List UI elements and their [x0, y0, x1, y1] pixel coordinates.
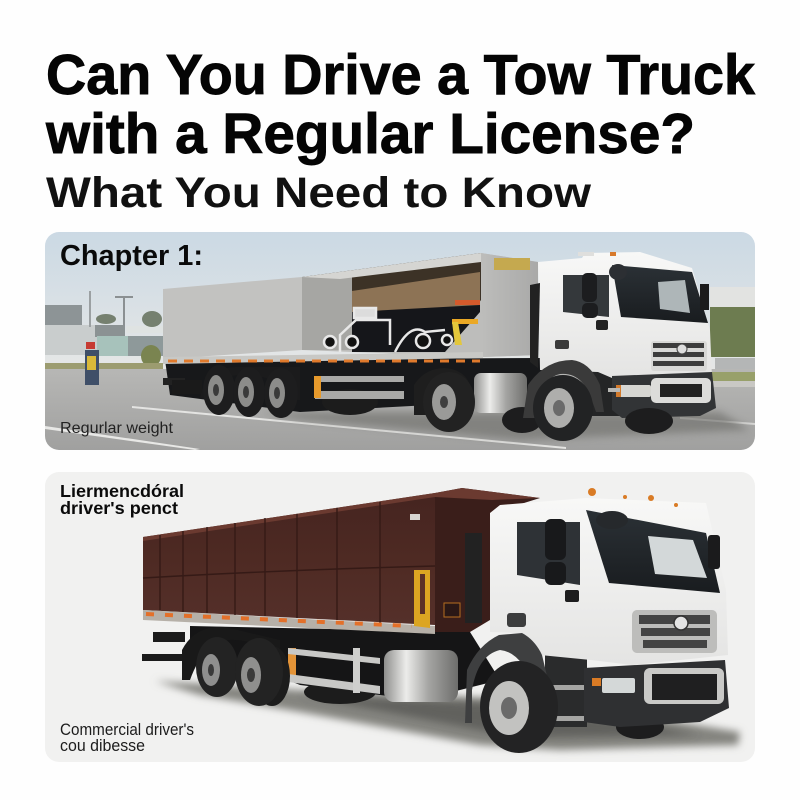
- heading: commercial driver's permit: Liermencdóral: [60, 481, 184, 501]
- rear wheels: [182, 627, 290, 706]
- truck cab: white: [502, 252, 712, 433]
- title: with a Regular License?: [45, 102, 695, 166]
- label: commercial driver's course: cou dibesse: [60, 736, 145, 755]
- title: What You Need to Know: [46, 169, 592, 217]
- background scene: sky, buildings and road: [45, 232, 755, 450]
- front wheels: [533, 375, 673, 441]
- panel: commercial truck: [45, 472, 755, 762]
- label: commercial driver's course: Commercial driver's: [60, 720, 194, 739]
- ground shadow: [155, 681, 740, 750]
- rear and middle wheels: [204, 372, 475, 432]
- side guard and fuel tank: [314, 373, 527, 413]
- truck cab: grille: [632, 610, 717, 653]
- truck cab: bumper and headlights: [608, 372, 716, 418]
- heading: commercial driver's permit: driver's penct: [60, 498, 178, 518]
- truck cab: grille: [651, 341, 707, 371]
- truck cab: bumper and headlights: [550, 660, 729, 727]
- title: [45, 43, 755, 217]
- brown cargo container: [143, 488, 540, 634]
- cargo: wheelchairs inside box: [324, 308, 452, 352]
- chassis: [142, 626, 500, 704]
- truck cab: white: [465, 488, 728, 739]
- title: Can You Drive a Tow Truck: [46, 43, 755, 107]
- chassis: [163, 358, 560, 415]
- panel background: [45, 472, 755, 762]
- front wheel: [480, 661, 558, 753]
- heading: commercial driver's permit: [60, 484, 183, 518]
- label: regular weight: Regurlar weight: [60, 420, 174, 437]
- cargo box with open side: [163, 253, 538, 364]
- label: commercial driver's course: [60, 723, 194, 751]
- side guard and fuel tank: [288, 648, 458, 702]
- heading: chapter 1: Chapter 1:: [60, 240, 203, 272]
- panel: regular weight truck: [45, 232, 755, 450]
